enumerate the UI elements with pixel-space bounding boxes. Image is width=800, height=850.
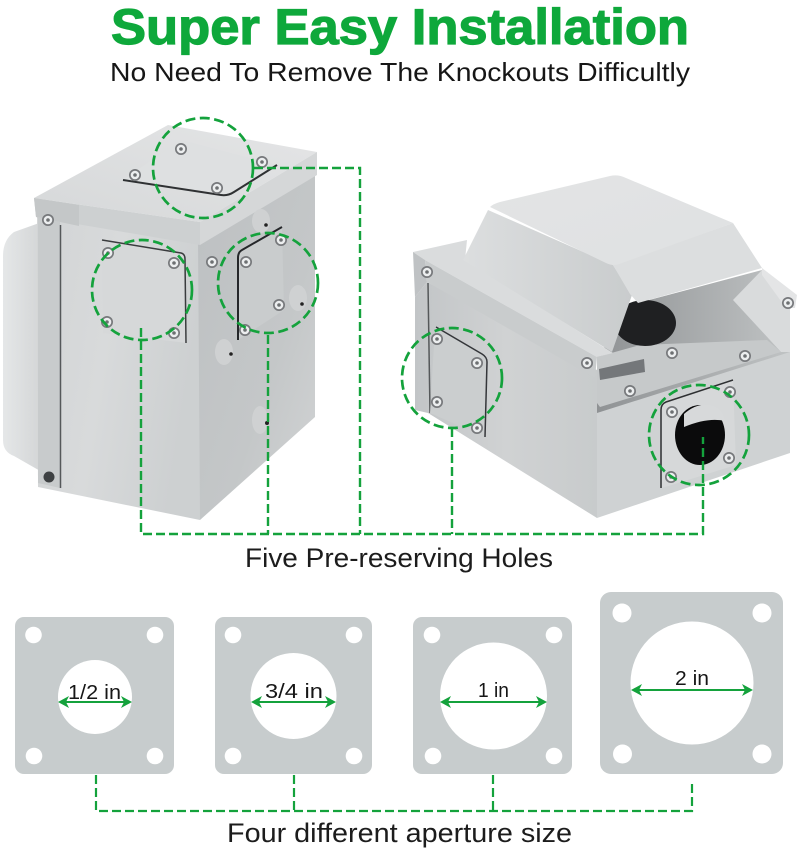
plate 2 in [600, 592, 783, 774]
left face [37, 214, 200, 520]
left enclosure photo [3, 125, 317, 520]
top plate [123, 140, 277, 196]
left strip [38, 217, 60, 488]
front plate [101, 240, 187, 343]
plate 1/2 in: 1/2 in [68, 682, 121, 704]
knockout bumps [215, 209, 307, 434]
hood left slope [463, 210, 632, 352]
caption: holes: Five Pre-reserving Holes [245, 543, 553, 573]
strip edge [428, 283, 430, 413]
plate 1 in: 1 in [478, 680, 509, 702]
lid flange [425, 260, 597, 378]
plate 2 in: 2 in [675, 668, 709, 690]
caption: apertures: Four different aperture size [227, 818, 572, 848]
lid screws [421, 266, 433, 278]
left face [415, 282, 597, 518]
hood front slope [613, 223, 762, 303]
plate 1/2 in [15, 617, 174, 774]
front plate with opening [661, 380, 736, 488]
lid top [413, 240, 613, 357]
interior wall [733, 270, 790, 352]
side plate [430, 327, 487, 437]
dashed connectors to holes [141, 168, 703, 534]
right enclosure photo [413, 175, 797, 518]
lid left section [34, 198, 79, 226]
plate 3/4 in: 3/4 in [265, 681, 323, 703]
plate 3/4 in [215, 617, 372, 774]
dashed connectors to plates [96, 775, 692, 811]
label [599, 359, 645, 380]
hood top [490, 175, 733, 265]
title: Super Easy Installation [111, 0, 689, 55]
dashed highlight circles [92, 118, 749, 485]
side plate [238, 227, 287, 340]
top face [34, 125, 317, 222]
inner plate [597, 340, 781, 407]
front face [597, 350, 790, 518]
rubber grommet [614, 300, 676, 346]
subtitle: No Need To Remove The Knockouts Difficultly [110, 57, 690, 87]
hood right wing [762, 268, 797, 308]
lid corner [413, 252, 427, 297]
interior [597, 270, 790, 413]
rear cover [3, 222, 42, 472]
right face [198, 170, 315, 520]
inner screws [624, 347, 751, 397]
plate 1 in [413, 617, 572, 774]
lid front lip [34, 198, 200, 245]
lid side lip [200, 152, 317, 245]
